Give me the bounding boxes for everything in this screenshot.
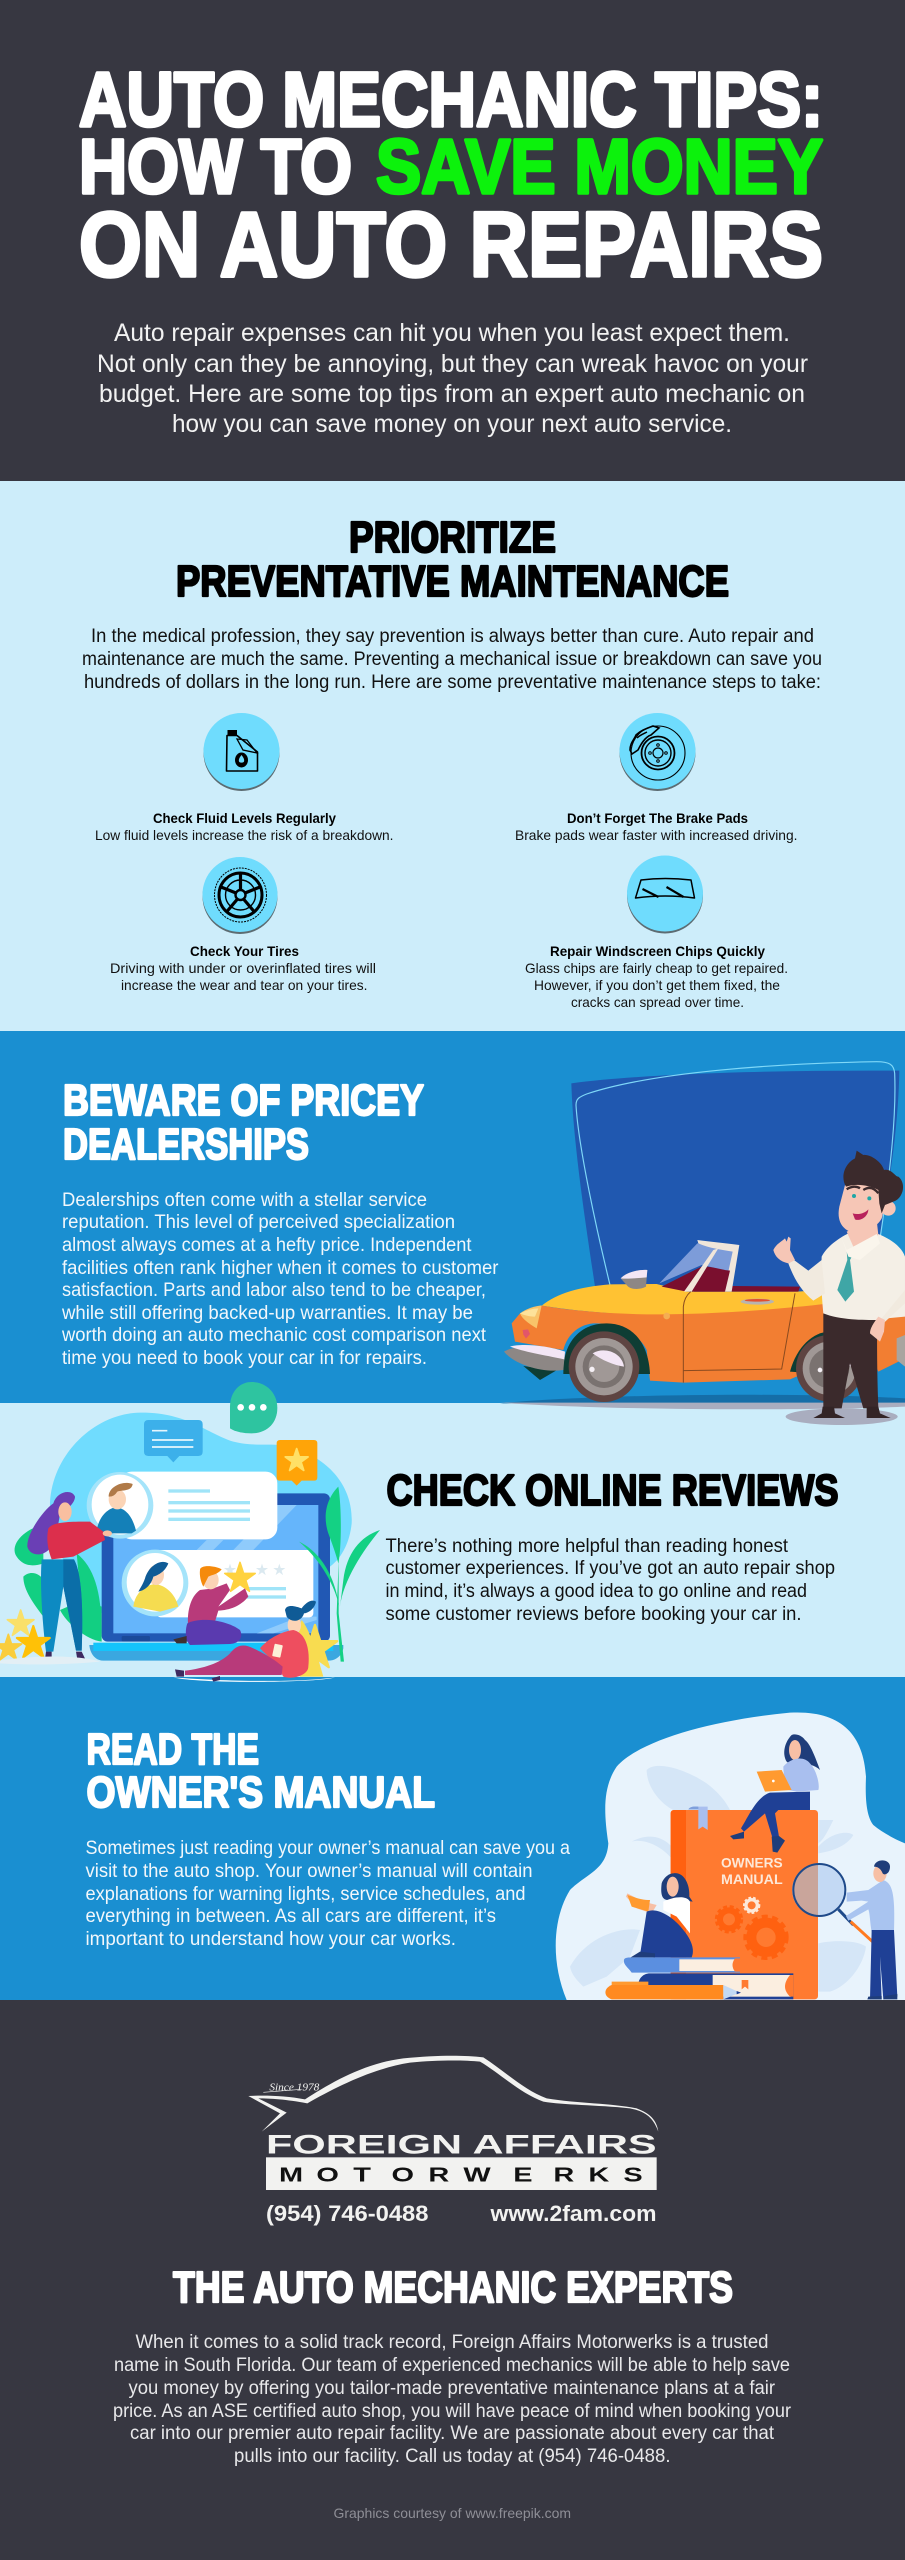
logo: foreign affairs motorwerks: FOREIGN AFFAIRS <box>266 2129 657 2159</box>
item: check tires <box>110 943 376 993</box>
text: prevention intro: maintenance are much the same. Preventing a mechanical issue or breakdown can save you <box>82 649 822 670</box>
intro text: Not only can they be annoying, but they can wreak havoc on your <box>97 350 808 378</box>
text: about the company: When it comes to a solid track record, Foreign Affairs Motorwerks is a trusted <box>136 2332 768 2353</box>
heading: the auto mechanic experts: THE AUTO MECHANIC EXPERTS <box>173 2263 733 2312</box>
illustration: owner's manual book <box>556 1712 905 2000</box>
intro text: Auto repair expenses can hit you when you least expect them. <box>114 319 790 347</box>
panel: dealerships background <box>0 1031 905 1403</box>
text: dealerships: Dealerships often come with a stellar service <box>62 1190 427 1211</box>
text: dealerships <box>61 1190 499 1369</box>
text: dealerships: while still offering backed-up warranties. It may be <box>61 1303 473 1324</box>
item: brake pads: Don’t Forget The Brake Pads <box>567 810 748 826</box>
heading: beware of pricey dealerships: DEALERSHIPS <box>63 1120 309 1169</box>
panel: reviews background <box>0 1403 905 1677</box>
text: owner's manual: Sometimes just reading your owner’s manual can save you a <box>86 1838 570 1859</box>
heading: prioritize preventative maintenance: PRIORITIZE <box>349 513 556 562</box>
panel: intro background <box>0 0 905 481</box>
credit line: Graphics courtesy of www.freepik.com <box>334 2505 571 2521</box>
icon: fluid jug <box>204 713 280 791</box>
title: ON AUTO REPAIRS <box>79 194 823 296</box>
text: prevention intro: In the medical profession, they say prevention is always better than cure. Auto repair and <box>91 626 814 647</box>
item: check tires: Driving with under or overinflated tires will <box>110 960 376 976</box>
heading: beware of pricey dealerships: BEWARE OF PRICEY <box>63 1076 424 1125</box>
item: brake pads: Brake pads wear faster with increased driving. <box>515 827 798 843</box>
heading: read the owner's manual: OWNER'S MANUAL <box>86 1768 435 1817</box>
heading: beware of pricey dealerships <box>63 1076 424 1169</box>
text: dealerships: reputation. This level of perceived specialization <box>62 1212 455 1233</box>
heading: read the owner's manual: READ THE <box>86 1725 259 1774</box>
icon: brake disc <box>620 713 696 791</box>
text: online reviews: There’s nothing more helpful than reading honest <box>386 1536 789 1557</box>
item: windscreen chips <box>525 943 788 1010</box>
text: about the company <box>113 2332 792 2467</box>
text: online reviews <box>386 1536 835 1625</box>
contact: phone and website <box>266 2201 656 2226</box>
item: windscreen chips: However, if you don’t get them fixed, the <box>534 977 780 993</box>
text: owner's manual: visit to the auto shop. Your owner’s manual will contain <box>86 1861 532 1882</box>
icon: tire <box>202 857 278 934</box>
text: online reviews: customer experiences. If you’ve got an auto repair shop <box>386 1558 835 1579</box>
text: dealerships: almost always comes at a hefty price. Independent <box>62 1235 472 1256</box>
text: dealerships: time you need to book your car in for repairs. <box>62 1348 427 1369</box>
intro text: budget. Here are some top tips from an expert auto mechanic on <box>99 380 805 408</box>
text: prevention intro <box>82 626 822 693</box>
text: about the company: you money by offering you tailor-made preventative maintenance plans at a fair <box>128 2378 776 2399</box>
illustration: online reviews <box>0 1382 380 1682</box>
title <box>79 57 823 296</box>
text: about the company: pulls into our facility. Call us today at (954) 746-0488. <box>234 2446 670 2467</box>
panel: manual background <box>0 1677 905 2000</box>
title: HOW TO <box>79 124 352 210</box>
item: windscreen chips: Glass chips are fairly cheap to get repaired. <box>525 960 788 976</box>
item: check fluid levels: Low fluid levels increase the risk of a breakdown. <box>95 827 394 843</box>
text: owner's manual: important to understand how your car works. <box>86 1929 456 1950</box>
illustration: car and mechanic <box>500 1062 905 1425</box>
illustration: owner's manual book: MANUAL <box>721 1871 783 1887</box>
item: brake pads <box>515 810 798 843</box>
logo: foreign affairs motorwerks <box>248 2056 658 2190</box>
heading: prioritize preventative maintenance: PREVENTATIVE MAINTENANCE <box>176 557 729 606</box>
logo: foreign affairs motorwerks: MOTORWERKS <box>279 2164 643 2187</box>
text: online reviews: in mind, it’s always a good idea to go online and read <box>386 1581 807 1602</box>
text: owner's manual <box>86 1838 570 1950</box>
intro text <box>97 319 808 438</box>
contact: phone and website: (954) 746-0488 <box>266 2201 428 2226</box>
contact: phone and website: www.2fam.com <box>489 2201 656 2226</box>
item: check fluid levels: Check Fluid Levels Regularly <box>153 810 336 826</box>
text: dealerships: satisfaction. Parts and labor also tend to be cheaper, <box>62 1280 486 1301</box>
item: check tires: Check Your Tires <box>190 943 299 959</box>
text: owner's manual: explanations for warning lights, service schedules, and <box>86 1884 526 1905</box>
icon: windscreen <box>627 856 703 934</box>
logo: foreign affairs motorwerks: Since 1978 <box>269 2083 319 2094</box>
item: check tires: increase the wear and tear on your tires. <box>121 977 368 993</box>
text: dealerships: worth doing an auto mechanic cost comparison next <box>61 1325 487 1346</box>
item: windscreen chips: Repair Windscreen Chips Quickly <box>550 943 765 959</box>
text: prevention intro: hundreds of dollars in the long run. Here are some preventative maintenance steps to take: <box>84 672 821 693</box>
text: online reviews: some customer reviews before booking your car in. <box>386 1604 802 1625</box>
intro text: how you can save money on your next auto service. <box>172 410 732 438</box>
text: about the company: car into our premier auto repair facility. We are passionate about every car that <box>130 2423 775 2444</box>
text: about the company: name in South Florida. Our team of experienced mechanics will be able to help save <box>114 2355 790 2376</box>
item: check fluid levels <box>95 810 394 843</box>
heading: read the owner's manual <box>86 1725 435 1817</box>
panel: prioritize background <box>0 481 905 1031</box>
title: SAVE MONEY <box>376 124 823 210</box>
panel: footer background <box>0 2000 905 2560</box>
text: owner's manual: everything in between. As all cars are different, it’s <box>86 1906 496 1927</box>
text: dealerships: facilities often rank higher when it comes to customer <box>62 1258 499 1279</box>
illustration: owner's manual book: OWNERS <box>721 1854 783 1870</box>
text: about the company: price. As an ASE certified auto shop, you will have peace of mind when booking your <box>113 2401 792 2422</box>
heading: prioritize preventative maintenance <box>176 513 729 606</box>
item: windscreen chips: cracks can spread over time. <box>571 994 744 1010</box>
